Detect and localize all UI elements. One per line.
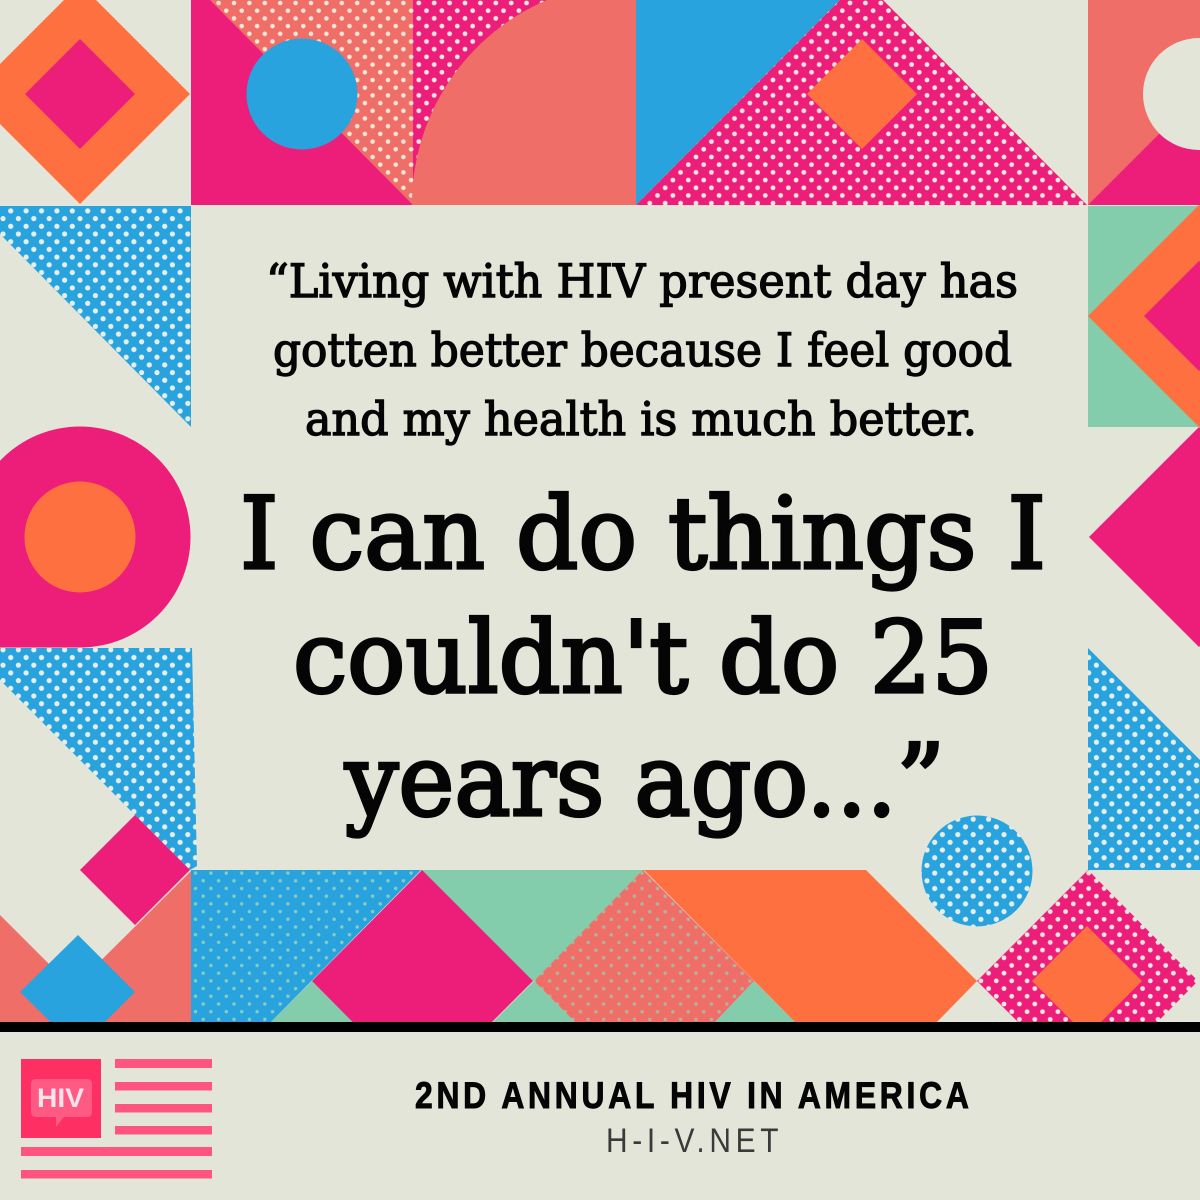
tile: dotted salmon diamond: [534, 870, 754, 1022]
tile: salmon triangles bottom left: [0, 871, 191, 1022]
divider bar: [0, 1022, 1200, 1032]
tile: small pink diamond: [80, 815, 190, 925]
tile: dotted pink diamond with orange centre: [977, 870, 1198, 1022]
quote: intro text: gotten better because I feel good: [273, 323, 1012, 377]
tile: green block: [421, 870, 645, 981]
logo: HIV flag: [21, 1059, 212, 1178]
tile: pink diamond right edge: [1089, 427, 1200, 647]
tile: blue diamond: [20, 935, 135, 1022]
quote: large highlighted text: couldn't do 25: [293, 601, 993, 716]
tile: green square with orange and pink diamonds: [1088, 205, 1200, 427]
quote: intro text: “Living with HIV present day has: [266, 254, 1018, 308]
logo: speech bubble: [31, 1079, 92, 1127]
tile: dotted blue triangle top left: [0, 206, 191, 427]
tile: dotted blue triangle lower left: [0, 648, 197, 870]
footer title: 2ND ANNUAL HIV IN AMERICA: [415, 1076, 969, 1117]
tile: pink large diamond: [312, 870, 533, 1022]
quote: large highlighted text: years ago...”: [344, 724, 945, 839]
logo: flag stripes: [21, 1059, 212, 1178]
tile: dotted blue block: [191, 870, 421, 1022]
tile: orange hexagon: [644, 870, 977, 1022]
tile: dotted blue circle: [922, 816, 1032, 926]
quote: large highlighted text: I can do things I: [240, 477, 1046, 592]
tile: pink teardrop with orange circle: [0, 426, 190, 648]
quote: large highlighted text: [240, 477, 1046, 839]
tile: dotted pink with salmon quarter circle: [412, 0, 636, 205]
tile: orange diamond with pink centre: [0, 0, 190, 204]
tile: pink triangle with blue circle: [191, 0, 413, 205]
quote: intro text: and my health is much better.: [305, 392, 977, 446]
tile: dotted blue shape right edge: [1088, 648, 1200, 870]
logo: HIV text: HIV: [37, 1083, 84, 1113]
logo: flag canton: [21, 1059, 101, 1138]
tile: green small triangles: [271, 981, 795, 1022]
footer url: H-I-V.NET: [606, 1121, 778, 1159]
tile: blue triangle and dotted pink triangle with orange diamond: [636, 0, 1087, 205]
quote: intro text: [266, 254, 1018, 446]
tile: salmon square with pink triangle and cream circle: [1088, 0, 1200, 205]
